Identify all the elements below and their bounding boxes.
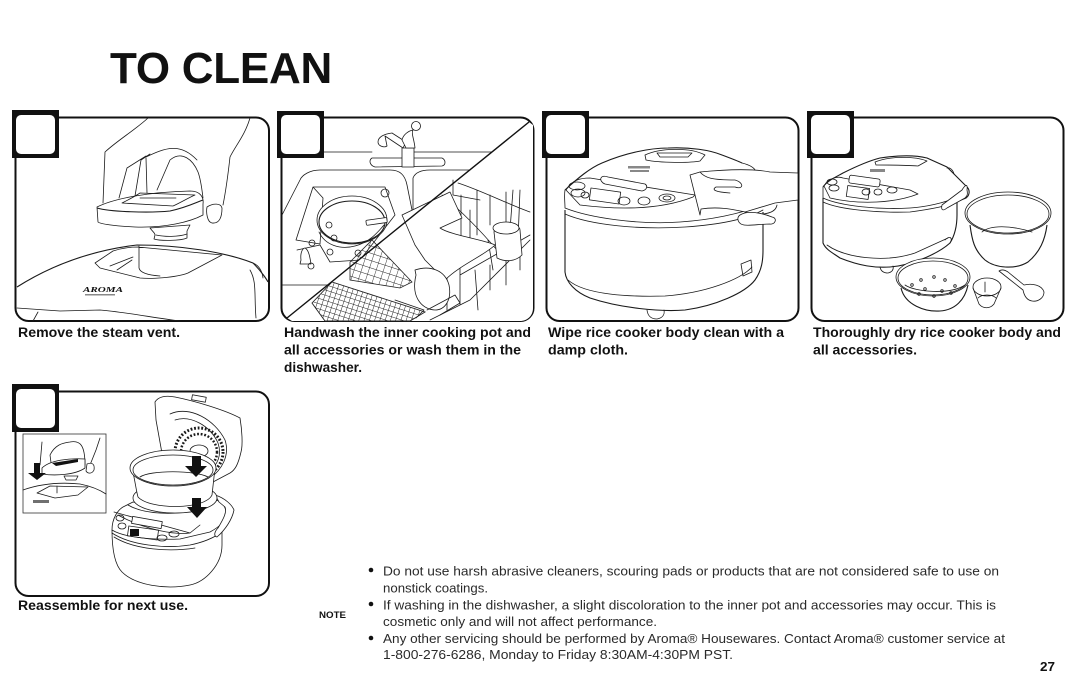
illustration: cooker body with pot: [112, 450, 234, 587]
caption: step 3: Wipe rice cooker body clean with a: [548, 325, 785, 340]
caption: step 2: all accessories or wash them in the: [284, 342, 522, 358]
caption: step 4: all accessories.: [813, 342, 917, 358]
step number box 3: [542, 111, 589, 158]
note bullets: Do not use harsh abrasive cleaners, scouring pads or products that are not considered safe to use on: [383, 564, 999, 578]
note bullets: nonstick coatings.: [383, 580, 488, 596]
illustration: cooker lid: [17, 245, 268, 321]
brand logo: AROMA: [81, 286, 124, 294]
note bullets: 1-800-276-6286, Monday to Friday 8:30AM-4:30PM PST.: [383, 647, 733, 662]
arrow: steamer down: [187, 498, 207, 518]
page number: 27: [1040, 659, 1055, 674]
note bullets: If washing in the dishwasher, a slight discoloration to the inner pot and accessories may occur. This is: [383, 598, 997, 612]
illustration: cooker and accessories: [823, 156, 1051, 311]
step number box 2: [277, 111, 324, 158]
caption: step 3: damp cloth.: [548, 342, 628, 358]
arrow: pot down: [185, 456, 207, 477]
step number box 5: [12, 384, 59, 432]
panel: step 3 wipe body: [546, 118, 798, 321]
illustration: inset steam vent: [23, 434, 106, 513]
note bullets: cosmetic only and will not affect performance.: [383, 614, 657, 629]
caption: step 3: [548, 325, 785, 358]
step number box 1: [12, 110, 59, 158]
caption: step 2: [284, 325, 531, 375]
caption: step 2: Handwash the inner cooking pot and: [284, 325, 531, 340]
illustration: rice cooker being wiped: [565, 148, 798, 319]
illustration: sink and faucet: [282, 122, 505, 285]
panel: step 5 reassemble: [16, 392, 269, 596]
panel: step 2 wash: [282, 118, 534, 321]
caption: step 5: Reassemble for next use.: [18, 598, 188, 613]
panel: step 4 dry: [812, 118, 1064, 321]
step number box 4: [807, 111, 854, 158]
panel: step 1 remove steam vent: [16, 118, 269, 321]
illustration: dishwasher rack: [287, 122, 533, 321]
title: TO CLEAN: [110, 44, 332, 93]
diagonal divider: [287, 122, 529, 318]
caption: step 4: Thoroughly dry rice cooker body and: [813, 325, 1061, 340]
note bullets: [369, 564, 1005, 662]
note bullets: Any other servicing should be performed by Aroma® Housewares. Contact Aroma® customer service at: [383, 631, 1005, 646]
note label: NOTE: [319, 610, 346, 621]
illustration: open lid: [155, 395, 242, 490]
caption: step 2: dishwasher.: [284, 360, 362, 375]
illustration: hand lifting steam vent: [97, 118, 250, 240]
caption: step 1: Remove the steam vent.: [18, 325, 180, 340]
caption: step 4: [813, 325, 1061, 358]
